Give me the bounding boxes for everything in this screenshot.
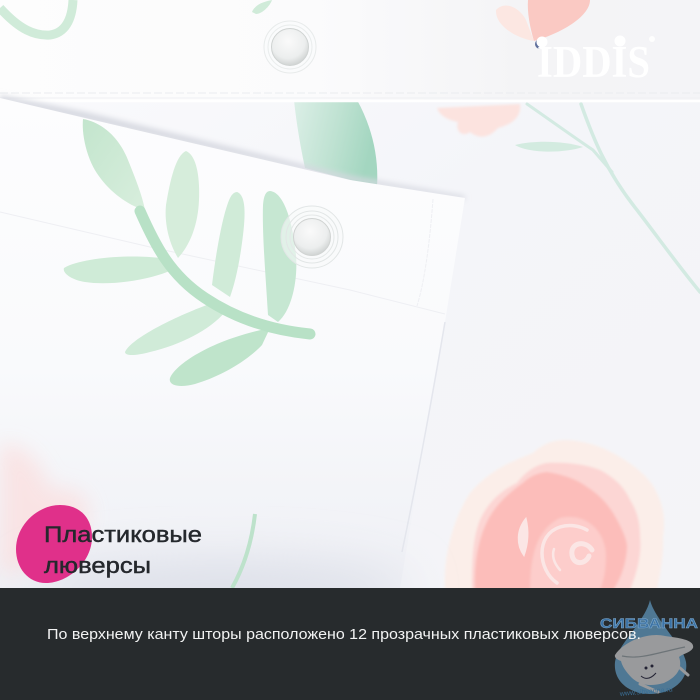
flap crease <box>402 322 445 552</box>
top band <box>0 0 700 101</box>
small green leaf <box>252 0 272 14</box>
flap grommet <box>281 206 343 268</box>
flower on top band <box>496 0 590 41</box>
shadow under flap <box>0 95 465 200</box>
heading: люверсы <box>44 553 151 578</box>
right stems and leaf <box>515 104 700 292</box>
dark footer bar <box>0 588 700 700</box>
teal leaf behind flap <box>294 100 377 187</box>
top grommet <box>264 21 316 73</box>
front flap <box>0 98 465 588</box>
watermark: Sibvanna bathtub drop <box>600 600 698 698</box>
watermark: Sibvanna bathtub drop: www.sibvanna.ru <box>619 686 673 698</box>
description: По верхнему канту шторы расположено 12 прозрачных пластиковых люверсов. <box>47 627 641 643</box>
heading <box>44 522 202 578</box>
lower green stem <box>232 514 255 588</box>
rose <box>445 440 664 590</box>
logo: IDDIS: IDDIS <box>537 37 650 87</box>
lower-left shade <box>60 556 380 588</box>
pink blob <box>16 505 92 583</box>
heading: Пластиковые <box>44 522 202 547</box>
watermark: Sibvanna bathtub drop: СИБВАННА <box>600 615 698 631</box>
top-left green curl <box>0 0 73 35</box>
flap stitching <box>0 199 445 314</box>
left blurred pink flower <box>0 444 88 575</box>
rose swirls <box>518 518 592 583</box>
green branch <box>64 119 310 386</box>
faded pink flower below seam <box>437 104 520 137</box>
